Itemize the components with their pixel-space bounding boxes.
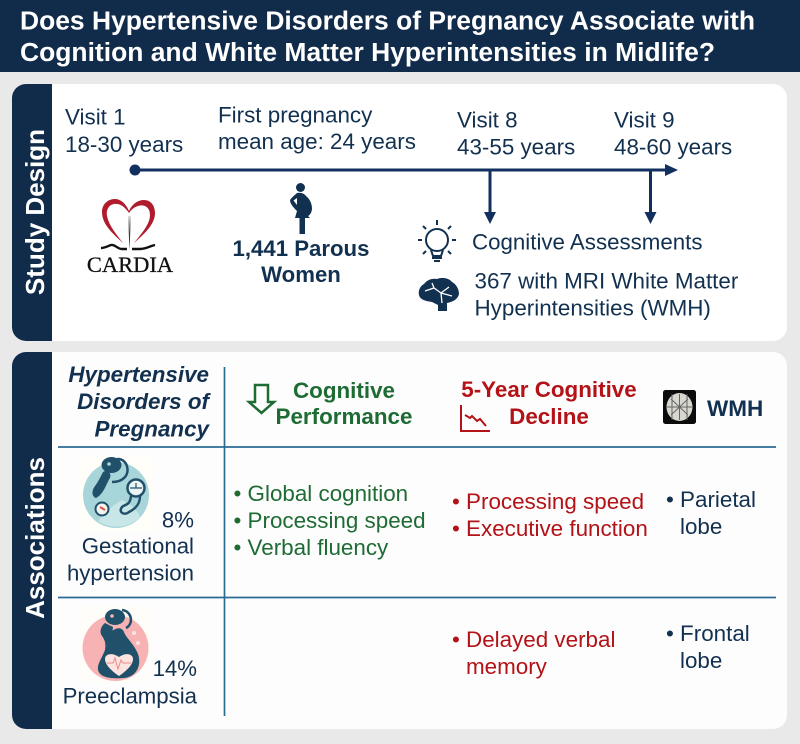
list: gestational decline: • Executive function <box>452 516 648 541</box>
text: preeclampsia: Preeclampsia <box>63 684 198 708</box>
list: gestational WMH: lobe <box>680 514 722 539</box>
list: gestational cognitive performance: • Verbal fluency <box>234 535 389 560</box>
text: sample size: Women <box>261 262 341 287</box>
column heading: cognitive performance <box>276 378 412 429</box>
panel: associations <box>12 352 787 729</box>
title banner: Does Hypertensive Disorders of Pregnancy Associate with <box>20 8 755 36</box>
timeline labels: mean age: 24 years <box>218 129 416 154</box>
text: cognitive assessments: Cognitive Assessments <box>472 230 703 254</box>
column heading: WMH: WMH <box>707 396 763 421</box>
title banner: Cognition and White Matter Hyperintensities in Midlife? <box>20 39 715 67</box>
icon: MRI brain <box>663 390 696 424</box>
icon: light bulb <box>418 220 456 261</box>
list: gestational decline: • Processing speed <box>452 489 644 514</box>
list: preeclampsia WMH: • Frontal <box>666 621 750 646</box>
heading: study design: Study Design <box>20 129 50 295</box>
timeline labels: 18-30 years <box>65 132 183 157</box>
timeline labels: Visit 1 <box>65 104 126 130</box>
list: preeclampsia decline <box>452 627 615 679</box>
timeline labels: 43-55 years <box>457 134 575 160</box>
column heading: five-year decline <box>461 377 637 429</box>
heading: associations: Associations <box>20 457 50 619</box>
list: gestational WMH <box>666 487 756 539</box>
text: preeclampsia: 14% <box>153 656 197 681</box>
list: gestational cognitive performance <box>234 481 426 560</box>
text: gestational hypertension: 8% <box>162 508 194 532</box>
column heading: cognitive performance: Performance <box>276 404 412 429</box>
icon: CARDIA logo <box>87 199 174 277</box>
timeline labels: First pregnancy <box>218 102 373 128</box>
timeline arrow <box>130 164 678 224</box>
text: preeclampsia <box>63 656 198 708</box>
icon: down arrow <box>249 385 274 413</box>
text: gestational hypertension: Gestational <box>82 534 194 558</box>
title banner <box>0 0 800 72</box>
list: preeclampsia decline: memory <box>466 654 548 679</box>
text: gestational hypertension: hypertension <box>67 560 194 586</box>
column heading: hypertensive disorders: Disorders of <box>77 389 212 414</box>
list: gestational cognitive performance: • Processing speed <box>234 508 426 533</box>
panel: study design <box>12 84 787 341</box>
column heading: hypertensive disorders: Pregnancy <box>94 416 211 442</box>
timeline labels: Visit 8 <box>457 108 518 132</box>
column heading: cognitive performance: Cognitive <box>293 378 395 403</box>
icon: decline chart <box>461 405 490 431</box>
column heading: hypertensive disorders <box>68 362 212 442</box>
text: MRI subgroup: Hyperintensities (WMH) <box>474 296 711 320</box>
text: MRI subgroup <box>474 268 739 320</box>
icon: CARDIA logo: CARDIA <box>87 252 174 277</box>
list: gestational decline <box>452 489 648 541</box>
list: gestational cognitive performance: • Global cognition <box>234 481 408 506</box>
list: preeclampsia decline: • Delayed verbal <box>452 627 615 652</box>
list: gestational WMH: • Parietal <box>666 487 756 512</box>
text: gestational hypertension <box>67 508 194 586</box>
table grid <box>58 367 776 716</box>
column heading: five-year decline: 5-Year Cognitive <box>461 377 637 402</box>
icon: gestational hypertension <box>80 457 154 531</box>
icon: brain <box>419 278 459 311</box>
text: sample size: 1,441 Parous <box>233 236 369 261</box>
icon: pregnant woman <box>290 183 312 234</box>
list: preeclampsia WMH: lobe <box>680 648 722 673</box>
text: sample size <box>233 236 369 287</box>
column heading: five-year decline: Decline <box>509 404 589 429</box>
timeline labels: 48-60 years <box>614 134 732 160</box>
timeline labels <box>65 102 732 160</box>
column heading: hypertensive disorders: Hypertensive <box>68 362 209 387</box>
icon: preeclampsia <box>80 606 154 682</box>
list: preeclampsia WMH <box>666 621 750 673</box>
text: MRI subgroup: 367 with MRI White Matter <box>474 268 739 294</box>
timeline labels: Visit 9 <box>614 108 675 132</box>
